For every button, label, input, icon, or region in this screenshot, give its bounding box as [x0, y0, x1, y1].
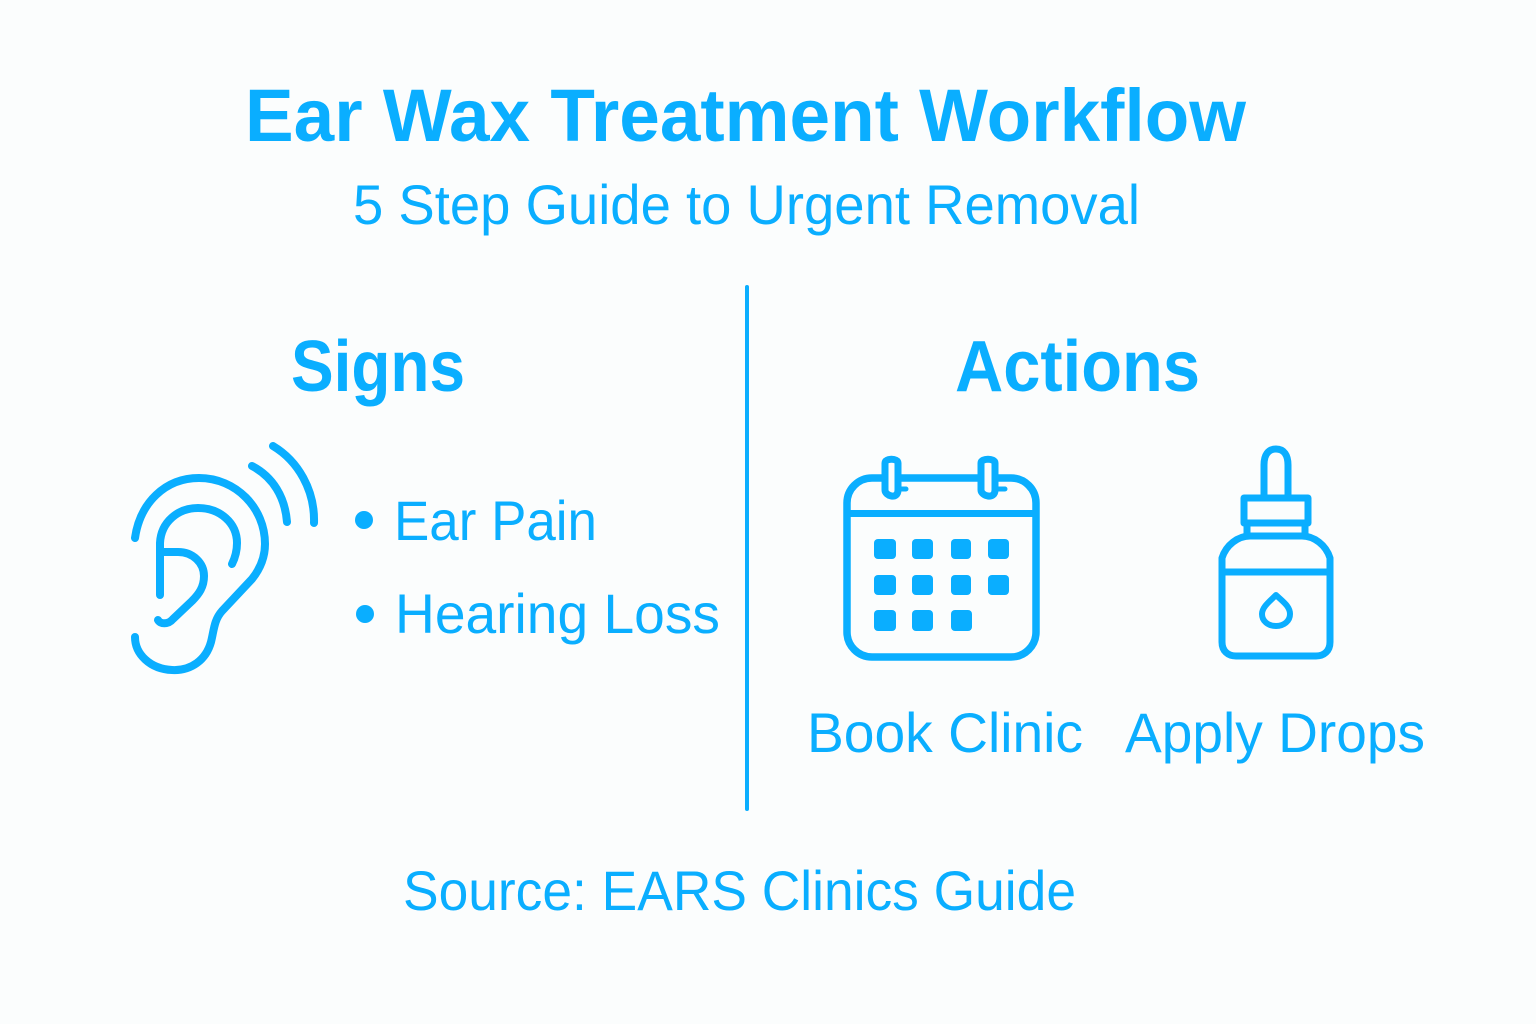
title: Ear Wax Treatment Workflow	[245, 74, 1246, 157]
panel: signs	[135, 327, 720, 670]
label: book clinic: Book Clinic	[807, 701, 1083, 764]
vertical divider	[745, 285, 749, 811]
subtitle: 5 Step Guide to Urgent Removal	[353, 173, 1140, 236]
heading: actions: Actions	[955, 327, 1200, 407]
icon: calendar	[847, 459, 1036, 657]
icon: ear with sound waves	[135, 446, 314, 670]
panel: actions	[807, 327, 1425, 764]
list item: hearing loss: Hearing Loss	[395, 582, 720, 645]
icon: dropper bottle	[1222, 449, 1330, 656]
heading: signs: Signs	[291, 327, 465, 407]
list item: ear pain: Ear Pain	[394, 489, 597, 552]
source note: Source: EARS Clinics Guide	[403, 859, 1076, 922]
label: apply drops: Apply Drops	[1125, 701, 1425, 764]
